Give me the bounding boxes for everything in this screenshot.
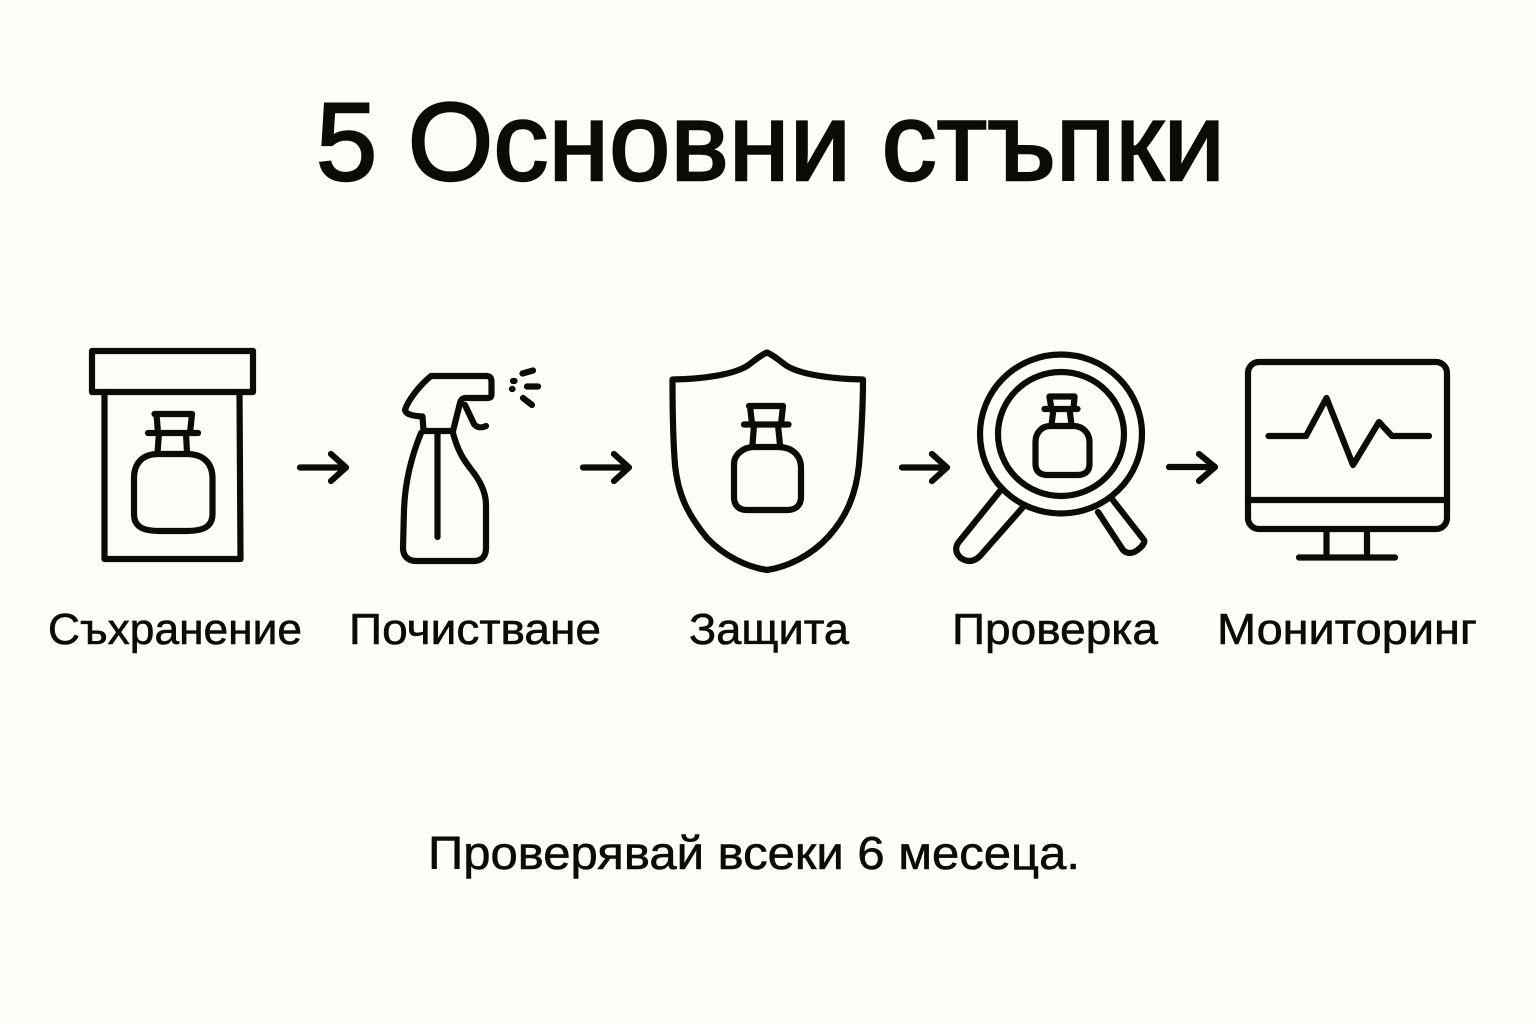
title: 5 Основни стъпки bbox=[316, 81, 1225, 204]
label: Мониторинг: Мониторинг bbox=[1217, 605, 1477, 654]
arrow 2 bbox=[583, 454, 629, 481]
step 4 icon: magnifying glass with bottle bbox=[956, 354, 1144, 561]
footer note: Проверявай всеки 6 месеца. bbox=[428, 827, 1080, 879]
step 1 icon: storage box with bottle bbox=[92, 351, 253, 559]
arrow 3 bbox=[902, 454, 947, 481]
label: Проверка: Проверка bbox=[952, 605, 1159, 654]
step 5 icon: monitor with pulse bbox=[1248, 362, 1447, 558]
arrow 4 bbox=[1169, 454, 1215, 481]
step 2 icon: spray bottle bbox=[403, 370, 538, 561]
label: Защита: Защита bbox=[689, 605, 850, 654]
label: Съхранение: Съхранение bbox=[48, 605, 302, 654]
arrow 1 bbox=[300, 454, 346, 481]
step 3 icon: shield with bottle bbox=[672, 352, 863, 570]
label: Почистване: Почистване bbox=[349, 605, 601, 654]
